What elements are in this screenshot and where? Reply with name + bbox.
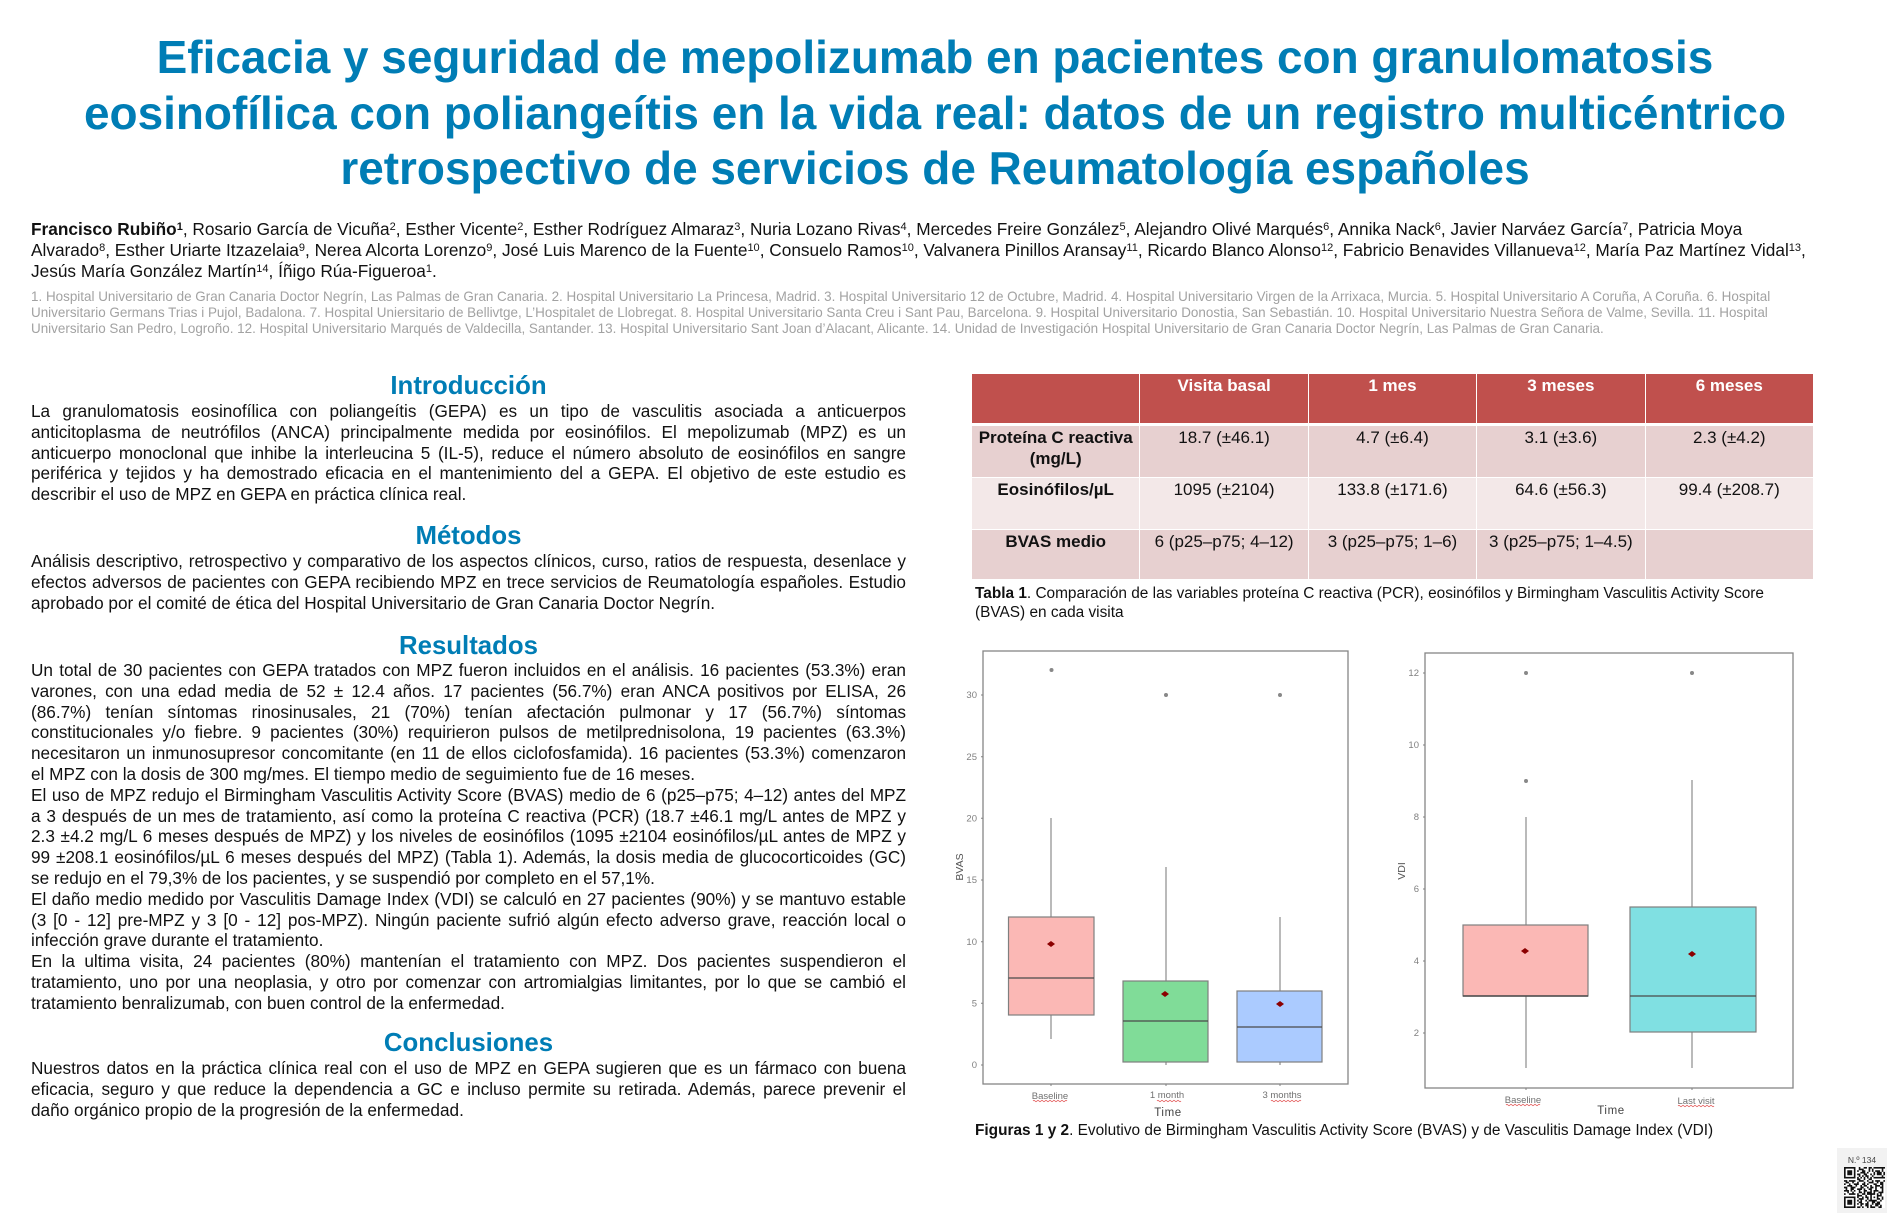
affiliations: 1. Hospital Universitario de Gran Canaria Doctor Negrín, Las Palmas de Gran Canaria. 2. Hospital Universitario La Princesa, Madrid. 3. Hospital Universitario 12 de Octubre, Madrid. 4. Hospital Universitario Virgen de la Arrixaca, Murcia. 5. Hospital Universitario A Coruña, A Coruña. 6. Hospital [31,289,1770,304]
text: métodos: efectos adversos de pacientes con GEPA recibiendo MPZ en trece servicios de Reumatología españoles. Estudio [31,572,906,592]
box: baseline [1463,925,1588,996]
table: variables por visita: 64.6 (±56.3) [1515,480,1607,499]
chart: BVAS boxplot: 10 [966,937,977,948]
text: resultados: necesitaron un inmunosupresor concomitante (en 11 de ellos ciclofosfamida). 16 pacientes (53.3%) comenzaron [31,743,906,763]
table: variables por visita: 1095 (±2104) [1174,480,1275,499]
text: resultados: El daño medio medido por Vasculitis Damage Index (VDI) se calculó en 27 pacientes (90%) y se mantuvo estable [31,889,906,909]
icon: QR code [1844,1167,1885,1208]
table: variables por visita: 4.7 (±6.4) [1356,428,1429,447]
affiliations: Universitario San Pedro, Logroño. 12. Hospital Universitario Marqués de Valdecilla, Santander. 13. Hospital Universitario Sant Joan d’Alacant, Alicante. 14. Unidad de Investigación Hospital Universitario de Gran Canaria Doctor Negrín, Las Palmas de Gran Canaria. [31,321,1604,336]
figure caption: Figuras 1 y 2. Evolutivo de Birmingham Vasculitis Activity Score (BVAS) y de Vasculitis Damage Index (VDI) [975,1122,1713,1139]
chart: VDI boxplot: 4 [1414,956,1419,967]
text: resultados: (86.7%) tenían síntomas rinosinusales, 21 (70%) tenían afectación pulmonar y 17 (56.7%) síntomas [31,702,906,722]
chart: VDI boxplot: Last visit [1678,1096,1715,1107]
text: resultados: se redujo en el 79,3% de los pacientes, y se suspendió por completo en el 57,1%. [31,868,655,888]
table: variables por visita: 3 (p25–p75; 1–4.5) [1489,532,1633,551]
table: variables por visita: 6 (p25–p75; 4–12) [1155,532,1294,551]
chart: BVAS boxplot [954,650,1349,1119]
chart: VDI boxplot: 10 [1408,740,1419,751]
table: variables por visita: 3.1 (±3.6) [1525,428,1597,447]
table: variables por visita: Proteína C reactiva [979,428,1133,447]
text: conclusiones: daño orgánico propio de la progresión de la enfermedad. [31,1100,464,1120]
whiskers [1526,780,1692,1068]
title: Eficacia y seguridad de mepolizumab en pacientes con granulomatosis [157,31,1713,83]
authors: Francisco Rubiño1, Rosario García de Vicuña2, Esther Vicente2, Esther Rodríguez Almaraz3, Nuria Lozano Rivas4, Mercedes Freire González5, Alejandro Olivé Marqués6, Annika Nack6, Javier Narváez García7, Patricia Moya [31,219,1742,239]
authors [31,219,1806,281]
chart: BVAS boxplot: 5 [972,998,977,1010]
text: métodos: Análisis descriptivo, retrospectivo y comparativo de los aspectos clínicos, curso, ratios de respuesta, desenlace y [31,551,906,571]
text: conclusiones: Nuestros datos en la práctica clínica real con el uso de MPZ en GEPA sugieren que es un fármaco con buena [31,1058,906,1078]
table: variables por visita: 133.8 (±171.6) [1337,480,1448,499]
table: variables por visita: (mg/L) [1030,449,1082,468]
table: variables por visita: Visita basal [1177,376,1271,395]
poster number and QR code [1837,1148,1887,1213]
table: variables por visita: 1 mes [1368,376,1417,395]
text: resultados: el MPZ con la dosis de 300 mg/mes. El tiempo medio de seguimiento fue de 16 meses. [31,764,695,784]
title [84,31,1786,194]
chart: VDI boxplot: 2 [1414,1028,1419,1039]
heading: Introducción: Introducción [390,372,547,400]
table: variables por visita: 3 meses [1527,376,1594,395]
title: eosinofílica con poliangeítis en la vida real: datos de un registro multicéntrico [84,87,1786,139]
chart: BVAS boxplot: 15 [966,875,977,886]
outliers [1050,668,1282,697]
heading: Métodos: Métodos [415,522,522,550]
text: resultados: (3 [0 - 12] pre-MPZ y 3 [0 - 12] pos-MPZ). Ningún paciente sufrió algún efecto adverso grave, reacción local o [31,910,906,930]
table: variables por visita: BVAS medio [1005,532,1106,551]
affiliations [31,289,1770,336]
text: resultados: infección grave durante el tratamiento. [31,930,323,950]
text: introducción: anticitoplasma de neutrófilos (ANCA) principalmente medida por eosinófilos. El mepolizumab (MPZ) es un [31,422,906,442]
table: variables por visita: Eosinófilos/µL [997,480,1114,499]
text: resultados: tratamiento, uno por una neoplasia, y otro por comenzar con artromialgias limitantes, por lo que se cambió el [31,972,906,992]
box: baseline [1008,917,1094,1015]
chart: VDI boxplot [1396,652,1794,1117]
text: resultados: En la ultima visita, 24 pacientes (80%) mantenían el tratamiento con MPZ. Dos pacientes suspendieron el [31,951,906,971]
chart: BVAS boxplot: 25 [966,752,977,763]
outliers [1524,671,1694,783]
text: conclusiones: eficacia, seguro y que reduce la dependencia a GC e incluso permite su retirada. Además, parece prevenir el [31,1079,906,1099]
text: conclusiones [31,1058,906,1120]
text: introducción: periférica y tejidos y ha demostrado eficacia en el mantenimiento del a GEPA. El objetivo de este estudio es [31,463,906,483]
box: last visit [1630,907,1756,1032]
text: métodos [31,551,906,613]
text: resultados: a 3 después de un mes de tratamiento, así como la proteína C reactiva (PCR) (18.7 ±46.1 mg/L antes de MPZ y [31,806,906,826]
chart: BVAS boxplot: Baseline [1032,1091,1068,1102]
text: introducción: La granulomatosis eosinofílica con poliangeítis (GEPA) es un tipo de vasculitis asociada a anticuerpos [31,401,906,421]
text: resultados: varones, con una edad media de 52 ± 12.4 años. 17 pacientes (56.7%) eran ANCA positivos por ELISA, 26 [31,681,906,701]
chart: BVAS boxplot: BVAS [954,853,966,881]
text: resultados: 2.3 ±4.2 mg/L 6 meses después de MPZ) y los niveles de eosinófilos (1095 ±2104 eosinófilos/µL antes de MPZ y [31,826,906,846]
text: resultados: tratamiento benralizumab, con buen control de la enfermedad. [31,993,505,1013]
chart: BVAS boxplot: Time [1154,1107,1182,1119]
poster number: N.º 134 [1848,1155,1876,1165]
text: resultados [31,660,906,1013]
text: resultados: 99 ±208.1 eosinófilos/µL 6 meses después del MPZ) (Tabla 1). Además, la dosis media de glucocorticoides (GC) [31,847,906,867]
chart: BVAS boxplot: 3 months [1262,1090,1302,1101]
heading: Resultados: Resultados [399,632,538,660]
text: introducción: anticuerpo monoclonal que inhibe la interleucina 5 (IL-5), reduce el número absoluto de eosinófilos en sangre [31,443,906,463]
text: resultados: constitucionales y/o fiebre. 9 pacientes (30%) requirieron pulsos de metilprednisolona, 19 pacientes (63.3%) [31,722,906,742]
chart: VDI boxplot: 8 [1414,812,1419,823]
authors: Alvarado8, Esther Uriarte Itzazelaia9, Nerea Alcorta Lorenzo9, José Luis Marenco de la Fuente10, Consuelo Ramos10, Valvanera Pinillos Aransay11, Ricardo Blanco Alonso12, Fabricio Benavides Villanueva12, María Paz Martínez Vidal13, [31,240,1806,260]
table: variables por visita [972,374,1813,579]
chart: VDI boxplot: Baseline [1505,1095,1541,1106]
chart: VDI boxplot: 6 [1414,884,1419,895]
box: 3 months [1237,991,1322,1062]
text: resultados: El uso de MPZ redujo el Birmingham Vasculitis Activity Score (BVAS) medio de 6 (p25–p75; 4–12) antes del MPZ [31,785,906,805]
table caption: (BVAS) en cada visita [975,604,1124,621]
text: métodos: aprobado por el comité de ética del Hospital Universitario de Gran Canaria Doctor Negrín. [31,593,715,613]
whiskers [1051,818,1280,1065]
table: variables por visita: 99.4 (±208.7) [1679,480,1780,499]
authors: Jesús María González Martín14, Íñigo Rúa-Figueroa1. [31,261,437,281]
text: introducción: describir el uso de MPZ en GEPA en práctica clínica real. [31,484,466,504]
affiliations: Universitario Germans Trias i Pujol, Badalona. 7. Hospital Uniersitario de Bellivtge, L’Hospitalet de Llobregat. 8. Hospital Universitario Santa Creu i Sant Pau, Barcelona. 9. Hospital Universitario Donostia, San Sebastián. 10. Hospital Universitario Nuestra Señora de Valme, Sevilla. 11. Hospital [31,305,1768,320]
chart: BVAS boxplot: 30 [966,690,977,701]
box: 1 month [1123,981,1208,1062]
chart: VDI boxplot: 12 [1408,668,1419,679]
table: variables por visita: 2.3 (±4.2) [1693,428,1766,447]
chart: BVAS boxplot: 20 [966,814,977,824]
chart: VDI boxplot: VDI [1396,862,1408,880]
table: variables por visita: 3 (p25–p75; 1–6) [1328,532,1457,551]
title: retrospectivo de servicios de Reumatología españoles [340,142,1530,194]
table caption: Tabla 1. Comparación de las variables proteína C reactiva (PCR), eosinófilos y Birmingham Vasculitis Activity Score [975,585,1764,602]
chart: VDI boxplot: Time [1597,1105,1625,1117]
chart: BVAS boxplot: 0 [972,1060,977,1071]
heading: Conclusiones: Conclusiones [384,1029,553,1057]
text: introducción [31,401,906,504]
text: resultados: Un total de 30 pacientes con GEPA tratados con MPZ fueron incluidos en el análisis. 16 pacientes (53.3%) eran [31,660,906,680]
table: variables por visita: 18.7 (±46.1) [1178,428,1270,447]
chart: BVAS boxplot: 1 month [1150,1090,1184,1101]
table caption [975,585,1764,621]
table: variables por visita: 6 meses [1696,376,1763,395]
